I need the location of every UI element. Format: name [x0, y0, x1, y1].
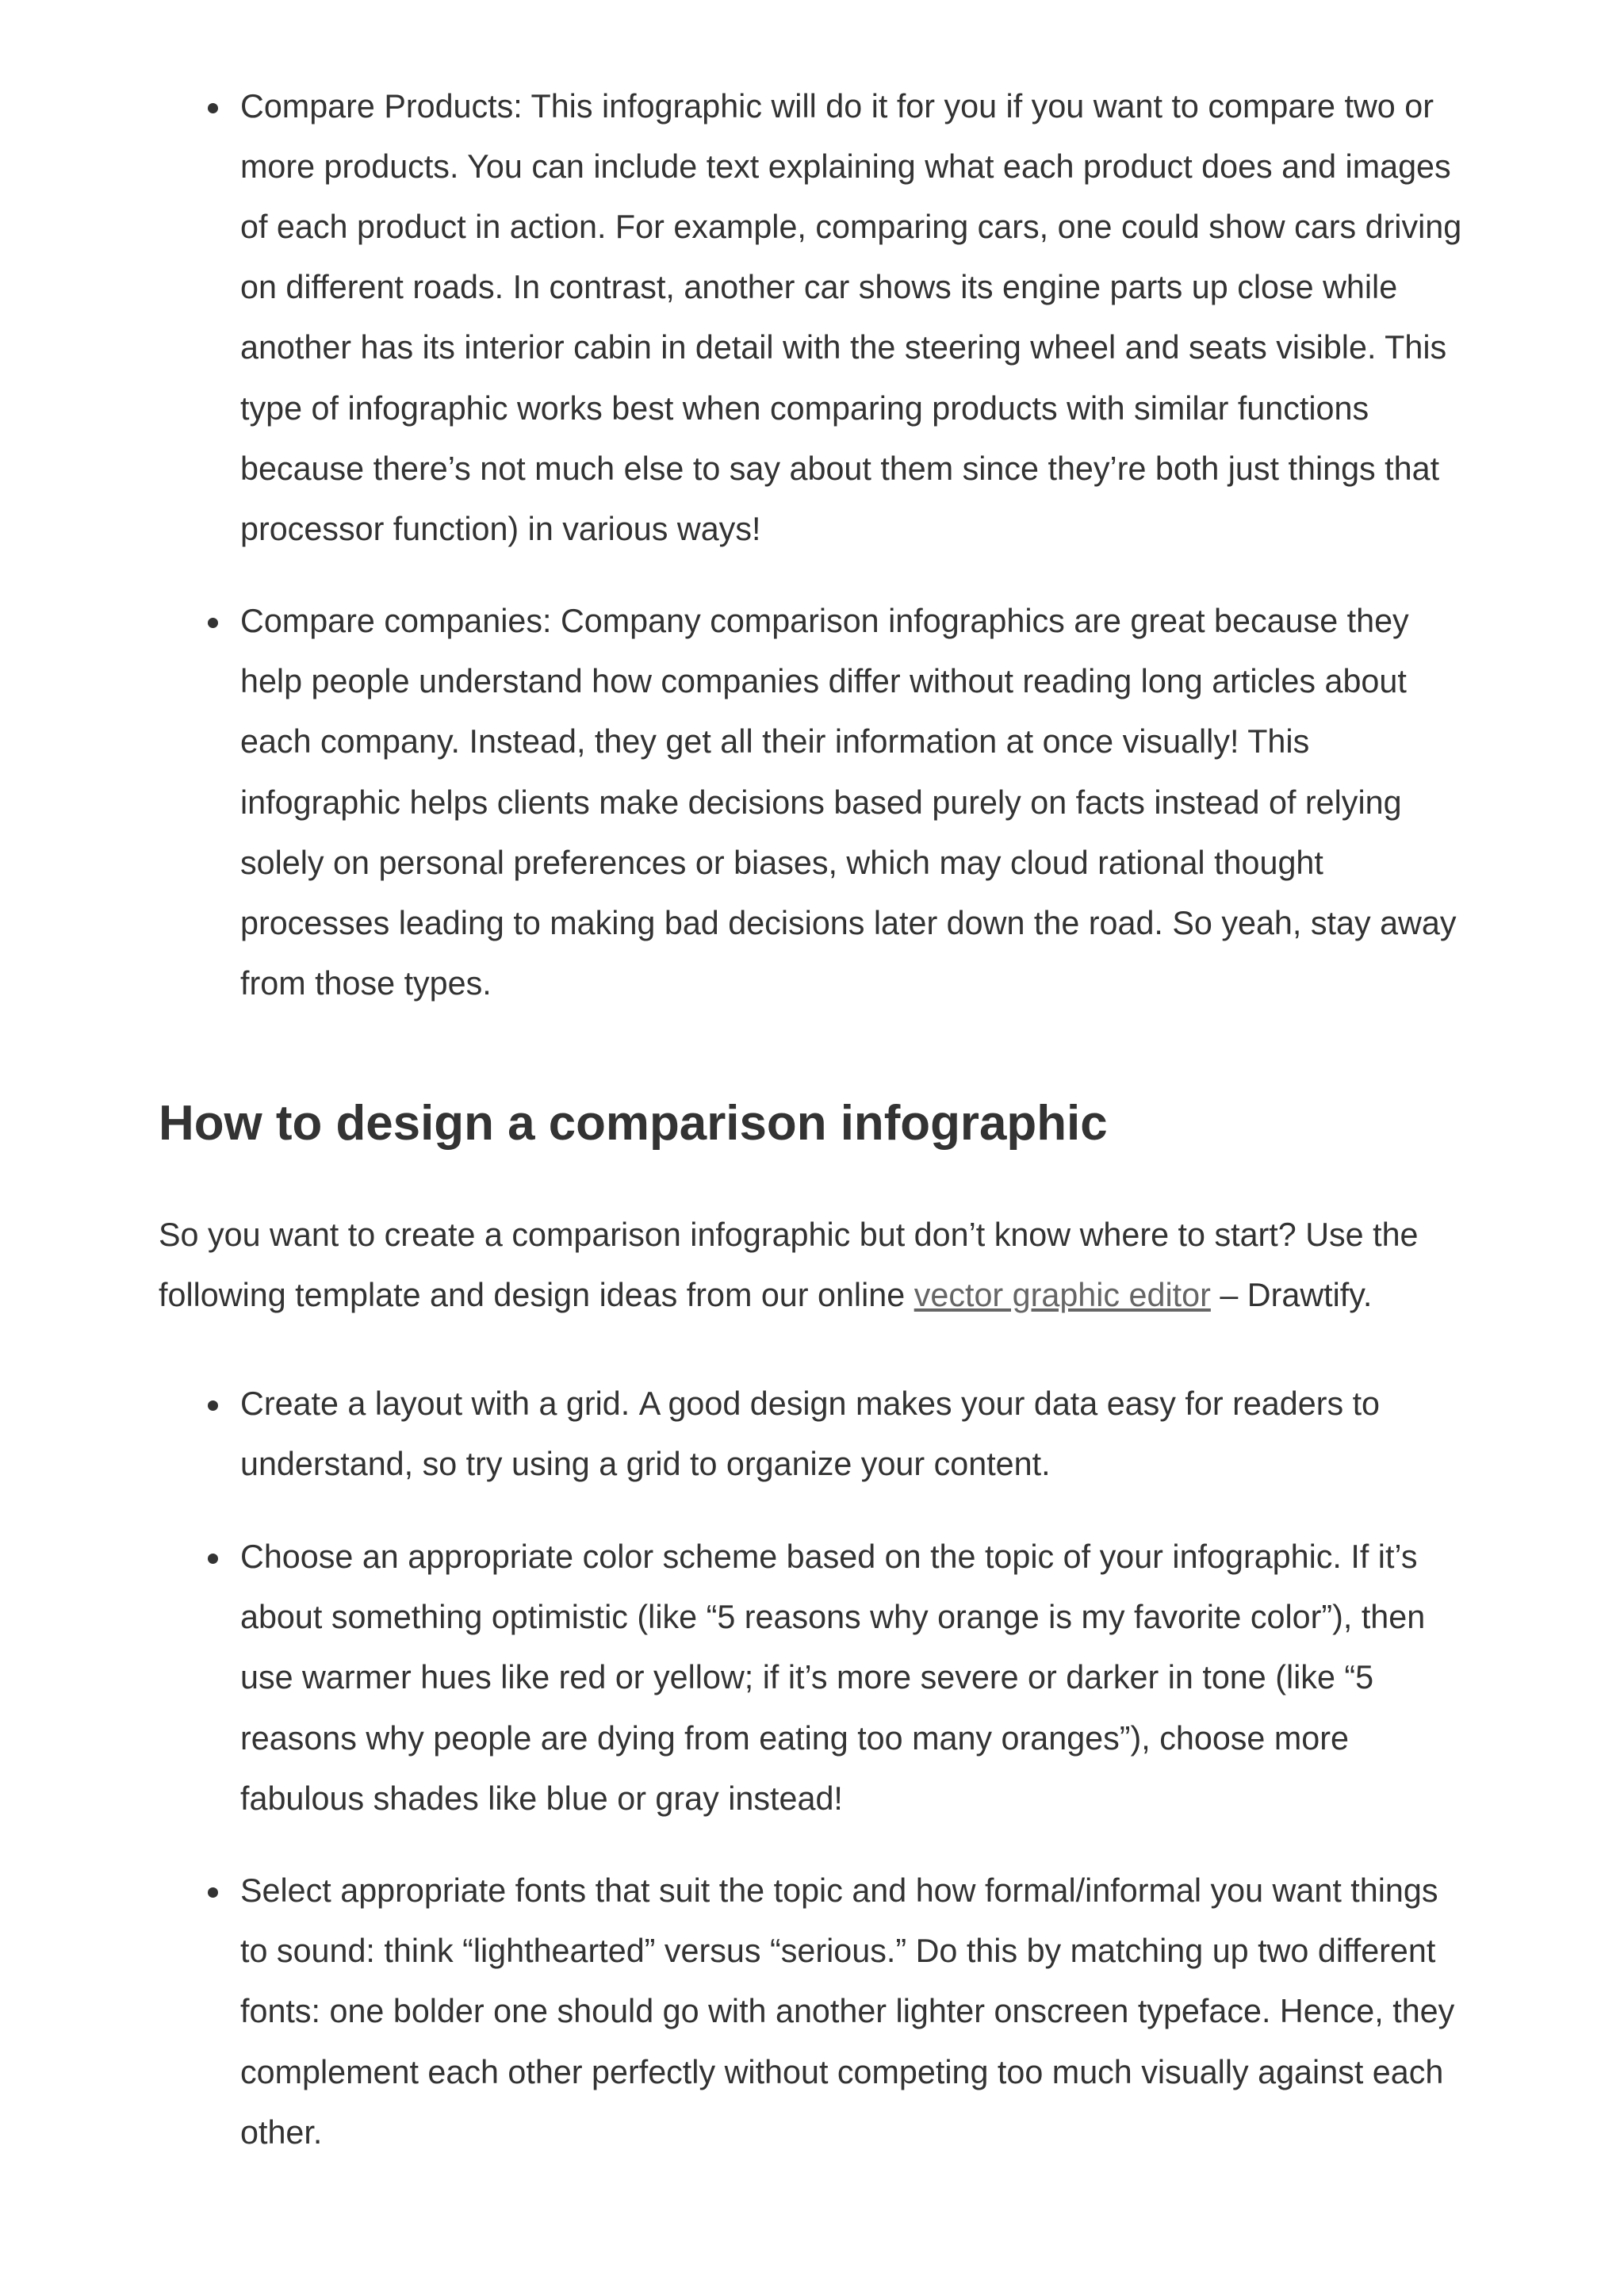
list item: compare products: of each product in action. For example, comparing cars, one could show cars driving: [240, 209, 1461, 245]
list item: compare companies: solely on personal preferences or biases, which may cloud rational thought: [240, 845, 1323, 881]
list item: layout with a grid: [208, 1385, 1380, 1482]
list item: compare companies: from those types.: [240, 965, 492, 1002]
list item: fonts: [208, 1872, 1454, 2151]
list item: compare companies: Compare companies: Company comparison infographics are great because they: [240, 603, 1409, 639]
list item: fonts: to sound: think “lighthearted” versus “serious.” Do this by matching up two different: [240, 1933, 1435, 1969]
list item: compare products: Compare Products: This infographic will do it for you if you want to compare two or: [240, 87, 1434, 124]
list item: color scheme: Choose an appropriate color scheme based on the topic of your infographic. If it’s: [240, 1538, 1418, 1575]
list item: compare products: processor function) in various ways!: [240, 511, 760, 547]
list item: compare products: [208, 87, 1461, 547]
list item: compare companies: processes leading to making bad decisions later down the road. So yeah, stay away: [240, 905, 1456, 941]
list item: fonts: Select appropriate fonts that suit the topic and how formal/informal you want things: [240, 1872, 1438, 1909]
list item: color scheme: [208, 1538, 1425, 1817]
list item: compare products: because there’s not much else to say about them since they’re both just things that: [240, 450, 1439, 487]
list item: fonts: complement each other perfectly without competing too much visually against each: [240, 2054, 1443, 2090]
list item: compare products: more products. You can include text explaining what each product does and images: [240, 148, 1451, 185]
list item: compare products: on different roads. In contrast, another car shows its engine parts up close while: [240, 269, 1397, 305]
list item: fonts: other.: [240, 2114, 322, 2151]
list item: fonts: fonts: one bolder one should go with another lighter onscreen typeface. Hence, they: [240, 1993, 1454, 2029]
intro paragraph: [159, 1216, 1419, 1313]
list item: layout with a grid: understand, so try using a grid to organize your content.: [240, 1446, 1051, 1482]
list item: compare companies: [208, 603, 1456, 1002]
list item: compare products: type of infographic works best when comparing products with similar functions: [240, 390, 1369, 427]
list item: color scheme: about something optimistic (like “5 reasons why orange is my favorite color”), then: [240, 1599, 1425, 1635]
list item: color scheme: fabulous shades like blue or gray instead!: [240, 1780, 843, 1817]
intro paragraph: following template and design ideas from our online vector graphic editor – Drawtify.: [159, 1277, 1372, 1313]
list item: compare products: another has its interior cabin in detail with the steering wheel and seats visible. This: [240, 329, 1446, 366]
list item: layout with a grid: Create a layout with a grid. A good design makes your data easy for readers to: [240, 1385, 1380, 1422]
intro paragraph: So you want to create a comparison infographic but don’t know where to start? Use the: [159, 1216, 1419, 1253]
list item: compare companies: help people understand how companies differ without reading long articles about: [240, 663, 1407, 699]
list item: color scheme: use warmer hues like red or yellow; if it’s more severe or darker in tone (like “5: [240, 1659, 1373, 1695]
list item: compare companies: each company. Instead, they get all their information at once visually! This: [240, 723, 1309, 760]
list item: color scheme: reasons why people are dying from eating too many oranges”), choose more: [240, 1720, 1349, 1757]
heading: how to design: How to design a comparison infographic: [159, 1096, 1108, 1151]
list item: compare companies: infographic helps clients make decisions based purely on facts instead of relying: [240, 784, 1402, 821]
